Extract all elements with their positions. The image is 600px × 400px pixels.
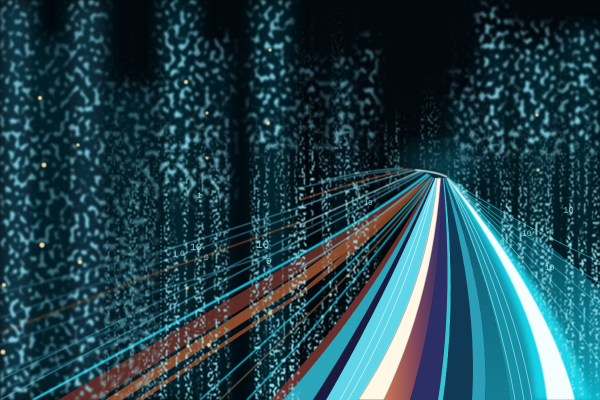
road: curve at horizon <box>415 170 447 177</box>
binary digits: 10 <box>190 243 202 254</box>
left streaks: blurred foreground lines <box>0 252 160 390</box>
band: teal left <box>283 178 435 400</box>
band: teal lined <box>446 178 547 400</box>
binary digits: 10 <box>256 240 269 252</box>
vanishing point glow <box>385 130 495 200</box>
data rain over right glow <box>264 178 600 400</box>
binary digits: 10 <box>563 206 574 216</box>
streak: orange <box>105 177 431 400</box>
band: dark red <box>270 178 433 400</box>
band: orange to violet <box>384 178 442 400</box>
warm data sparkles <box>1 48 540 354</box>
road: right side glow <box>448 178 600 400</box>
band: violet navy <box>410 178 447 400</box>
band: teal centre <box>444 178 486 400</box>
road: fine white lines <box>340 178 532 400</box>
band: navy <box>313 178 435 400</box>
binary digits <box>173 192 574 273</box>
binary digits: 0 <box>204 254 209 263</box>
band: pale cyan <box>326 178 437 400</box>
sharp data rain <box>102 26 600 400</box>
road: light bands <box>270 178 590 400</box>
streak: orange thin <box>135 177 431 400</box>
streak: red <box>58 176 430 400</box>
binary digits: 10 <box>364 200 372 208</box>
left streaks: wide bands <box>58 176 431 400</box>
binary digits: 0 <box>500 239 505 248</box>
binary digits: 10 <box>545 264 555 273</box>
band: thin teal <box>438 178 451 400</box>
band: white right <box>447 178 575 400</box>
band: white <box>358 178 441 400</box>
band: dark teal <box>445 178 510 400</box>
binary digits: 0 <box>266 257 271 267</box>
right streaks <box>450 180 600 362</box>
vertical data traces <box>161 190 270 400</box>
binary digits: 1 <box>197 192 202 201</box>
band: dark blue <box>443 178 473 400</box>
band: bright cyan glow <box>446 178 590 400</box>
binary digits: 10 <box>522 230 532 239</box>
left streaks: fine lines <box>0 168 434 400</box>
binary digits: 1 <box>173 251 178 260</box>
binary digits: 0 <box>180 250 185 259</box>
